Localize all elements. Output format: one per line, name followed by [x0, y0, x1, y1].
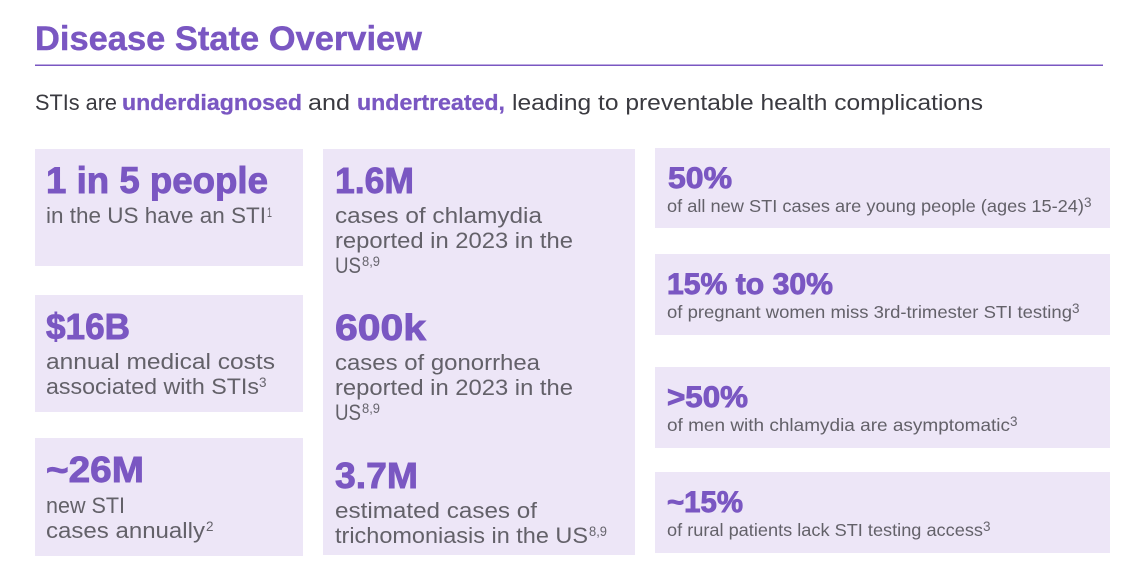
stat: 1 in 5 people: 1 in 5 people — [46, 160, 268, 201]
stat: >50%: >50% — [667, 381, 748, 414]
footnote 3: 3 — [983, 519, 991, 534]
footnote 2: 2 — [206, 519, 214, 534]
stat: 1.6M: 1.6M — [335, 160, 414, 201]
description: young people: of all new STI cases are young people (ages 15-24) — [667, 196, 1084, 216]
panel: $16B — [35, 295, 303, 412]
description: men with chlamydia: of men with chlamydia are asymptomatic — [667, 415, 1010, 435]
stat: ~15%: ~15% — [667, 486, 743, 519]
panel: 15% to 30% — [655, 254, 1110, 335]
footnote 3: 3 — [1072, 301, 1080, 316]
panel: >50% — [655, 367, 1110, 448]
description: trichomoniasis: estimated cases of — [335, 498, 538, 523]
description: gonorrhea: cases of gonorrhea — [335, 350, 541, 375]
description line 3: US — [335, 400, 361, 425]
description line 3: US — [335, 253, 361, 278]
stat: 50%: 50% — [668, 162, 732, 195]
description: pregnant women: of pregnant women miss 3rd-trimester STI testing — [667, 302, 1072, 322]
description line 2: cases annually — [46, 518, 205, 543]
title underline — [35, 64, 1103, 66]
description: new STI: new STI — [46, 493, 125, 518]
stat: $16B: $16B — [46, 306, 130, 347]
description: chlamydia: cases of chlamydia — [335, 203, 543, 228]
panel: 1 in 5 people — [35, 149, 303, 266]
footnote 8,9: 8,9 — [589, 524, 607, 539]
footnote 3: 3 — [1010, 414, 1018, 429]
subtitle — [35, 90, 983, 115]
description line 2: reported in 2023 in the — [335, 375, 573, 400]
footnote 1: 1 — [267, 205, 272, 220]
subtitle: leading to preventable health complications — [512, 90, 983, 115]
subtitle: underdiagnosed — [122, 90, 302, 115]
panel: US case counts — [323, 149, 635, 555]
stat: 600k: 600k — [335, 307, 427, 348]
description: US prevalence: in the US have an STI — [46, 203, 266, 228]
description: rural patients: of rural patients lack STI testing access — [667, 520, 983, 540]
subtitle: and — [308, 90, 350, 115]
stat: 3.7M: 3.7M — [335, 455, 418, 496]
panel: ~15% — [655, 472, 1110, 553]
title: Disease State Overview — [35, 20, 423, 58]
subtitle: STIs are — [35, 90, 117, 115]
footnote 3: 3 — [259, 375, 267, 390]
description line 2: reported in 2023 in the — [335, 228, 573, 253]
panel: 50% — [655, 148, 1110, 228]
description line 2: associated with STIs — [46, 374, 259, 399]
footnote 8,9: 8,9 — [362, 254, 380, 269]
description: medical costs: annual medical costs — [46, 349, 275, 374]
description line 2: trichomoniasis in the US — [335, 523, 588, 548]
panel: ~26M — [35, 438, 303, 556]
stat: ~26M: ~26M — [46, 449, 144, 490]
subtitle: undertreated, — [357, 90, 505, 115]
footnote 3: 3 — [1084, 195, 1092, 210]
stat: 15% to 30%: 15% to 30% — [667, 268, 833, 301]
footnote 8,9: 8,9 — [362, 401, 380, 416]
